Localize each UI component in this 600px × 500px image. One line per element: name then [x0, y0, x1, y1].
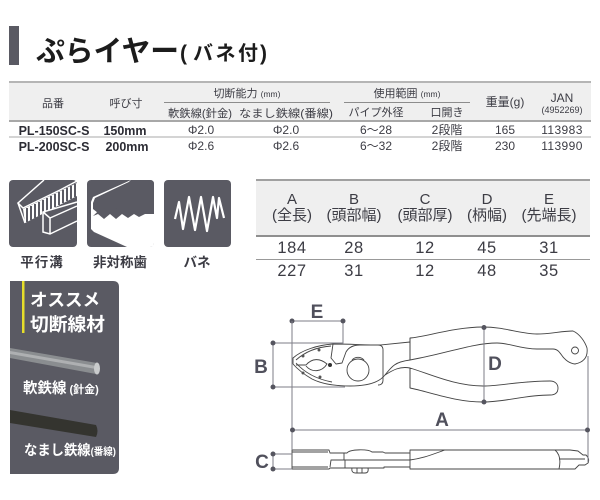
- dimensions table: (全長): [272, 207, 312, 224]
- specification table: 呼び寸: [110, 96, 142, 110]
- specification table: 使用範囲 (mm): [374, 86, 441, 100]
- dimensions table: 48: [477, 262, 497, 280]
- specification table: なまし鉄線(番線): [239, 106, 333, 120]
- dimension line: C: C: [255, 452, 269, 473]
- dimensions table: E: [544, 191, 554, 208]
- dimensions table: [256, 179, 590, 280]
- table row: PL-150SC-S: [19, 122, 583, 138]
- dimensions table: C: [420, 191, 431, 208]
- dimension line: E: E: [311, 302, 323, 323]
- table row: PL-200SC-S: 6～32: [360, 139, 392, 153]
- dimensions table: (先端長): [522, 207, 576, 224]
- icon label: 非対称歯: 非対称歯: [93, 254, 147, 270]
- dimensions table: 227: [277, 262, 307, 280]
- icon: spring: [164, 180, 231, 247]
- table row: PL-200SC-S: 200mm: [105, 140, 149, 154]
- dimension line: D: D: [488, 354, 502, 375]
- dimensions table: 35: [539, 262, 559, 280]
- steel rod: soft iron wire: [10, 348, 100, 374]
- dimensions table: B: [349, 191, 359, 208]
- table row: PL-150SC-S: 2段階: [432, 122, 462, 137]
- dimensions table: (頭部厚): [398, 207, 452, 224]
- table row: PL-200SC-S: 230: [495, 139, 515, 153]
- panel heading: オススメ: [30, 290, 100, 310]
- dimensions table: D: [482, 191, 493, 208]
- table row: PL-200SC-S: 2段階: [432, 138, 462, 153]
- dimension line: A: A: [435, 410, 449, 431]
- dimension line: D: [482, 325, 502, 404]
- icon: parallel groove: [9, 180, 77, 247]
- table row: PL-200SC-S: Φ2.6: [273, 139, 299, 153]
- dimensions table: (頭部幅): [326, 207, 382, 224]
- specification table: (4952269): [541, 105, 583, 115]
- title: ぷらイヤー: [36, 36, 179, 68]
- dimensions table: 184: [277, 239, 307, 257]
- panel: recommended cutting wire: [10, 281, 119, 474]
- specification table: 軟鉄線(針金): [168, 106, 232, 120]
- label: 軟鉄線(針金): 軟鉄線 (針金): [23, 379, 99, 397]
- dimensions table: 45: [477, 239, 497, 257]
- dimensions table: (柄幅): [467, 207, 507, 224]
- dimension line: B: B: [254, 357, 268, 378]
- title: ): [260, 42, 267, 65]
- dimensions table: 31: [344, 262, 364, 280]
- pliers diagram: side view: [292, 450, 589, 473]
- icon: asymmetric teeth: [87, 180, 154, 247]
- table row: PL-200SC-S: [19, 138, 583, 154]
- label: なまし鉄線(番線): なまし鉄線(番線): [24, 442, 116, 458]
- table row: PL-150SC-S: 113983: [541, 123, 583, 137]
- dimension line: A: [290, 321, 590, 462]
- icon label: バネ: バネ: [184, 255, 210, 270]
- specification table: [9, 81, 591, 154]
- dimensions table: 28: [344, 239, 364, 257]
- table row: PL-150SC-S: Φ2.0: [188, 123, 214, 137]
- table row: PL-200SC-S: PL-200SC-S: [19, 140, 89, 154]
- dimensions table: 12: [415, 239, 435, 257]
- specification table: 重量(g): [486, 95, 524, 109]
- title: バネ付: [193, 42, 258, 65]
- title: [9, 26, 267, 68]
- dimensions table: 31: [539, 239, 559, 257]
- specification table: パイプ外径: [348, 106, 404, 119]
- table row: PL-200SC-S: 113990: [541, 139, 583, 153]
- panel heading: 切断線材: [30, 314, 105, 335]
- specification table: 口開き: [430, 106, 464, 119]
- specification table: JAN: [551, 91, 573, 105]
- dimension line: B: [254, 340, 345, 390]
- specification table: 品番: [42, 97, 64, 110]
- dimensions table: A: [287, 191, 297, 208]
- table row: PL-150SC-S: 150mm: [103, 124, 147, 138]
- table row: PL-150SC-S: 165: [495, 123, 515, 137]
- steel rod: annealed iron wire: [10, 410, 98, 437]
- table row: PL-150SC-S: Φ2.0: [273, 123, 299, 137]
- table row: PL-150SC-S: PL-150SC-S: [19, 124, 89, 138]
- dimensions table: 12: [415, 262, 435, 280]
- panel heading: [30, 290, 105, 335]
- dimension line: C: [255, 452, 292, 473]
- icon label: 平行溝: 平行溝: [20, 254, 64, 270]
- pliers diagram: top view: [293, 327, 587, 402]
- title: (: [180, 42, 187, 65]
- table row: PL-200SC-S: Φ2.6: [188, 139, 214, 153]
- specification table: 切断能力 (mm): [214, 86, 281, 100]
- dimension line: E: [290, 302, 346, 344]
- table row: PL-150SC-S: 6～28: [360, 123, 392, 137]
